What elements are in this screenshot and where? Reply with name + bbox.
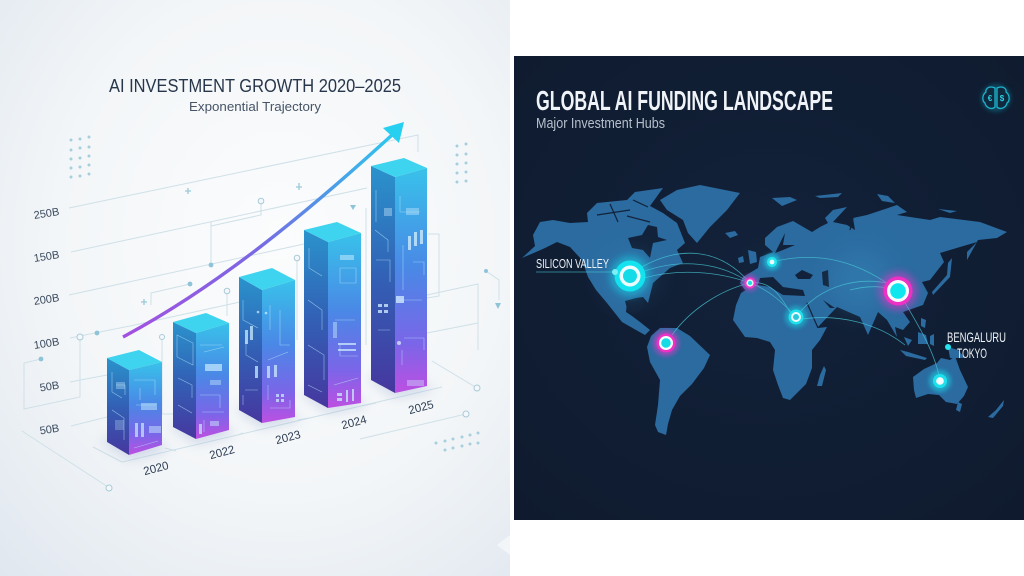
bar: 2023 (239, 268, 295, 423)
hub: South America (653, 330, 679, 356)
Eurasia (740, 205, 1007, 337)
subtitle: major investment hubs: Major Investment Hubs (536, 115, 665, 132)
Iceland (725, 231, 738, 238)
panel: global AI funding landscape (514, 56, 1024, 520)
label: Tokyo: TOKYO (957, 345, 987, 361)
y-axis labels: 50B (39, 423, 60, 437)
title: AI investment growth: AI INVESTMENT GROWTH 2020–2025 (109, 76, 401, 96)
Greenland (660, 185, 740, 243)
network arcs (536, 253, 940, 381)
label: Silicon Valley: SILICON VALLEY (536, 257, 609, 271)
icon: brain with currency symbols: € (988, 94, 993, 103)
hub: Southeast Asia (945, 344, 951, 350)
bar: 2022 (173, 313, 229, 439)
bar: 2020 (107, 350, 162, 455)
year labels: 2022 (208, 444, 236, 462)
subtitle: exponential trajectory: Exponential Trajectory (189, 99, 322, 114)
bar: 2024 (304, 222, 361, 408)
growth arrow (123, 122, 404, 337)
hub: Australia (929, 370, 951, 392)
hub: China (879, 272, 917, 310)
chart grid and circuit background (22, 135, 499, 487)
Islands (817, 366, 826, 386)
bar: 2025 (371, 158, 427, 393)
y-axis labels: 200B (33, 292, 60, 308)
year labels: 2024 (340, 414, 369, 432)
Australia (913, 356, 968, 404)
North America (522, 188, 685, 335)
panel: AI investment growth (0, 0, 510, 576)
year labels: 2020 (142, 460, 170, 478)
world map (522, 185, 1007, 435)
bar shadows (100, 370, 435, 460)
icon: brain with currency symbols (981, 84, 1011, 112)
y-axis labels: 50B (39, 380, 60, 394)
y-axis labels: 150B (33, 249, 60, 265)
Africa (733, 284, 827, 400)
icon: brain with currency symbols: $ (1000, 94, 1005, 103)
map inner water and coastlines (625, 225, 835, 314)
decorative dots (70, 136, 480, 452)
year labels (142, 399, 435, 478)
hub: Northern Europe (764, 254, 780, 270)
South America (647, 328, 710, 435)
hub: Western Europe (742, 275, 758, 291)
Japan (932, 258, 952, 295)
title: global AI funding landscape: GLOBAL AI FUNDING LANDSCAPE (536, 85, 833, 116)
y-axis labels: 100B (33, 336, 60, 352)
hub: Silicon Valley (610, 256, 650, 296)
y-axis labels (33, 206, 60, 437)
hub: East Africa (785, 306, 807, 328)
year labels: 2023 (274, 429, 302, 447)
y-axis labels: 250B (33, 206, 60, 222)
map glow around hubs (608, 250, 890, 310)
year labels: 2025 (407, 399, 435, 417)
